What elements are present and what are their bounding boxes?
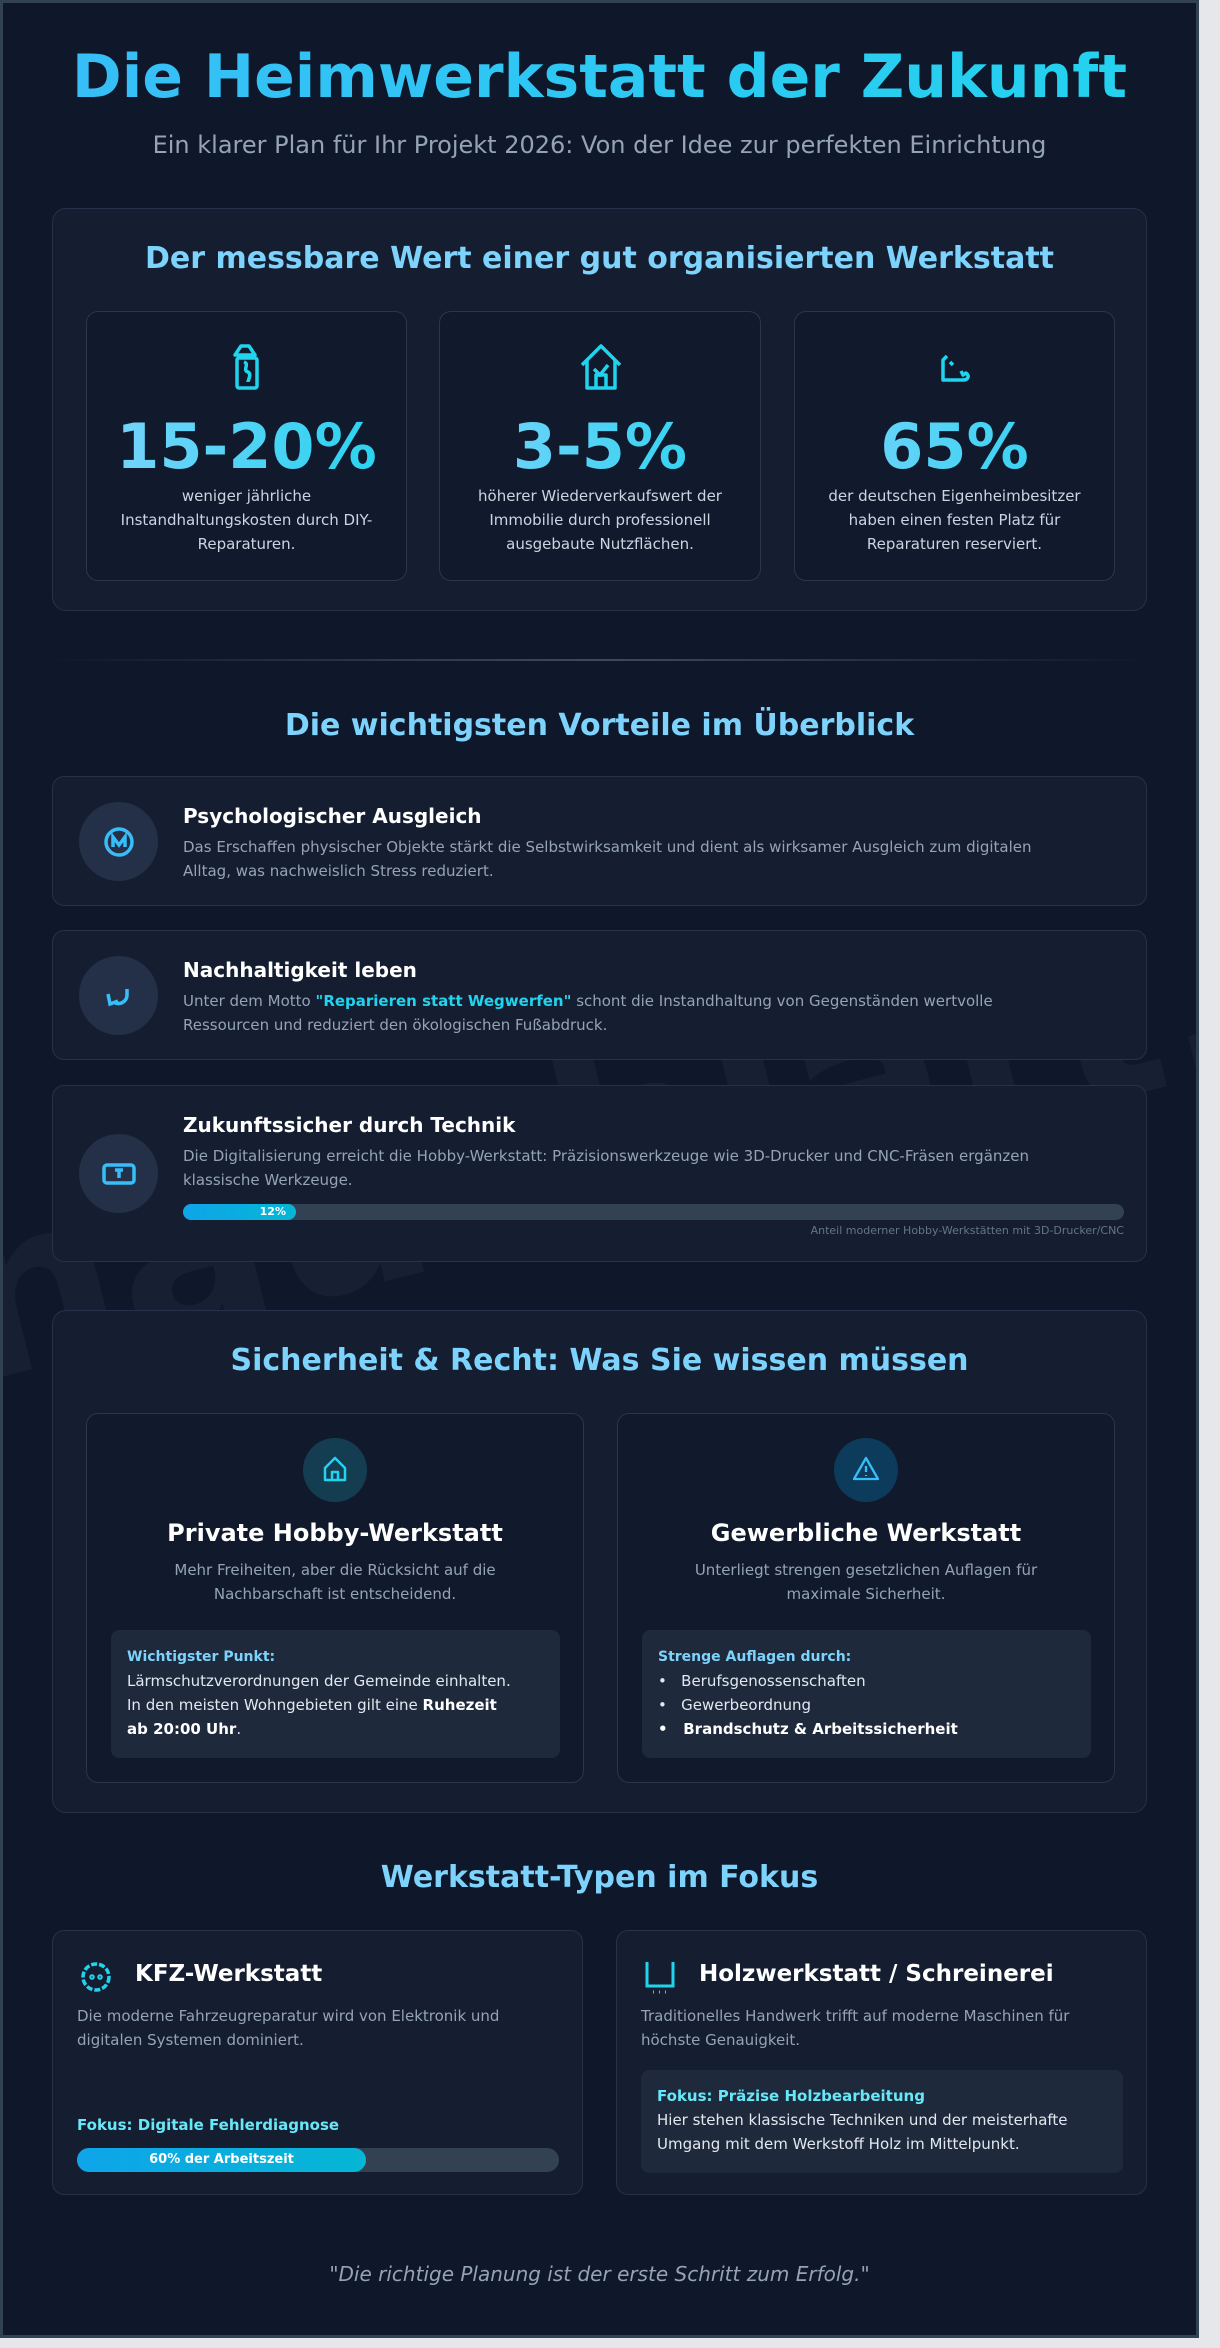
text: Traditionelles Handwerk trifft auf moderne Maschinen für höchste Genauigkeit. <box>641 2007 1069 2049</box>
benefit card 1 <box>52 776 1147 906</box>
icon: recycle <box>79 956 158 1035</box>
icon: bottle <box>233 344 259 390</box>
icon: vise <box>646 1962 674 1994</box>
info box: In den meisten Wohngebieten gilt eine Ruhezeit <box>127 1696 497 1714</box>
benefit text 2: Unter dem Motto "Reparieren statt Wegwerfen" schont die Instandhaltung von Gegenständen wertvolle Ressourcen und reduziert den ökologischen Fußabdruck. <box>183 992 993 1034</box>
icon: house <box>303 1438 367 1502</box>
progress bar 60%: 60% der Arbeitszeit <box>149 2152 294 2167</box>
heading: benefits: Die wichtigsten Vorteile im Überblick <box>285 708 914 743</box>
card: private <box>86 1413 584 1783</box>
stat text 2: höherer Wiederverkaufswert der Immobilie durch professionell ausgebaute Nutzflächen. <box>478 487 722 553</box>
title: KFZ-Werkstatt <box>135 1961 322 1987</box>
stat card 2 <box>439 311 761 581</box>
quote: "Die richtige Planung ist der erste Schritt zum Erfolg." <box>329 2262 870 2286</box>
stat card 1 <box>86 311 407 581</box>
info box <box>111 1630 560 1758</box>
stat number 2 <box>440 410 760 483</box>
caption: Anteil moderner Hobby-Werkstätten mit 3D-Drucker/CNC <box>811 1224 1124 1237</box>
benefit title 2: Nachhaltigkeit leben <box>183 958 417 982</box>
focus box: Hier stehen klassische Techniken und der meisterhafte Umgang mit dem Werkstoff Holz im Mittelpunkt. <box>657 2111 1068 2153</box>
heading: types: Werkstatt-Typen im Fokus <box>381 1860 818 1895</box>
card: commercial <box>617 1413 1115 1783</box>
heading: safety: Sicherheit & Recht: Was Sie wissen müssen <box>230 1343 969 1378</box>
info box <box>642 1630 1091 1758</box>
stat number 2: 3-5% <box>513 410 687 483</box>
progress bar 12%: 12% <box>260 1205 286 1218</box>
title: Holzwerkstatt / Schreinerei <box>699 1961 1054 1987</box>
info box: • Gewerbeordnung <box>658 1696 811 1714</box>
text: Die moderne Fahrzeugreparatur wird von Elektronik und digitalen Systemen dominiert. <box>77 2007 499 2049</box>
benefit title 3: Zukunftssicher durch Technik <box>183 1113 515 1137</box>
info box: ab 20:00 Uhr. <box>127 1720 241 1738</box>
progress bar 60% <box>77 2148 559 2172</box>
benefit card 3 <box>52 1085 1147 1262</box>
card: KFZ <box>52 1930 583 2195</box>
stat number 1: 15-20% <box>116 410 377 483</box>
stat text 1: weniger jährliche Instandhaltungskosten durch DIY-Reparaturen. <box>121 487 372 553</box>
info box: Wichtigster Punkt: <box>127 1649 275 1665</box>
benefit card 2 <box>52 930 1147 1060</box>
benefit text 1: Das Erschaffen physischer Objekte stärkt die Selbstwirksamkeit und dient als wirksamer Ausgleich zum digitalen Alltag, was nachweislich Stress reduziert. <box>183 838 1032 880</box>
stat number 3: 65% <box>880 410 1029 483</box>
icon: psyche <box>79 802 158 881</box>
benefit text 3: Die Digitalisierung erreicht die Hobby-Werkstatt: Präzisionswerkzeuge wie 3D-Drucker und CNC-Fräsen ergänzen klassische Werkzeuge. <box>183 1147 1029 1189</box>
icon: gear <box>81 1962 111 1992</box>
focus box: Fokus: Präzise Holzbearbeitung <box>657 2087 925 2105</box>
card text: Unterliegt strengen gesetzlichen Auflagen für maximale Sicherheit. <box>695 1561 1037 1603</box>
card title: Gewerbliche Werkstatt <box>711 1519 1021 1547</box>
heading: value: Der messbare Wert einer gut organisierten Werkstatt <box>145 241 1054 276</box>
icon: tool <box>941 354 970 382</box>
focus label: Fokus: Digitale Fehlerdiagnose <box>77 2116 339 2134</box>
stat card 3 <box>794 311 1115 581</box>
panel: value stats <box>52 208 1147 611</box>
card title: Private Hobby-Werkstatt <box>167 1519 503 1547</box>
icon: house <box>580 344 622 390</box>
info box: • Berufsgenossenschaften <box>658 1672 866 1690</box>
stat text 3: der deutschen Eigenheimbesitzer haben einen festen Platz für Reparaturen reserviert. <box>828 487 1081 553</box>
focus box <box>641 2070 1123 2173</box>
progress bar 12% <box>183 1204 1124 1220</box>
card: Holz <box>616 1930 1147 2195</box>
card text: Mehr Freiheiten, aber die Rücksicht auf die Nachbarschaft ist entscheidend. <box>174 1561 496 1603</box>
panel: safety <box>52 1310 1147 1813</box>
icon: printer <box>79 1134 158 1213</box>
info box: • Brandschutz & Arbeitssicherheit <box>658 1720 958 1738</box>
subtitle: Ein klarer Plan für Ihr Projekt 2026: Von der Idee zur perfekten Einrichtung <box>153 131 1046 159</box>
info box: Strenge Auflagen durch: <box>658 1649 851 1665</box>
icon: warning <box>834 1438 898 1502</box>
stat number 3 <box>795 410 1114 483</box>
benefit title 1: Psychologischer Ausgleich <box>183 804 482 828</box>
title: Die Heimwerkstatt der Zukunft <box>72 42 1127 112</box>
info box: Lärmschutzverordnungen der Gemeinde einhalten. <box>127 1672 511 1690</box>
